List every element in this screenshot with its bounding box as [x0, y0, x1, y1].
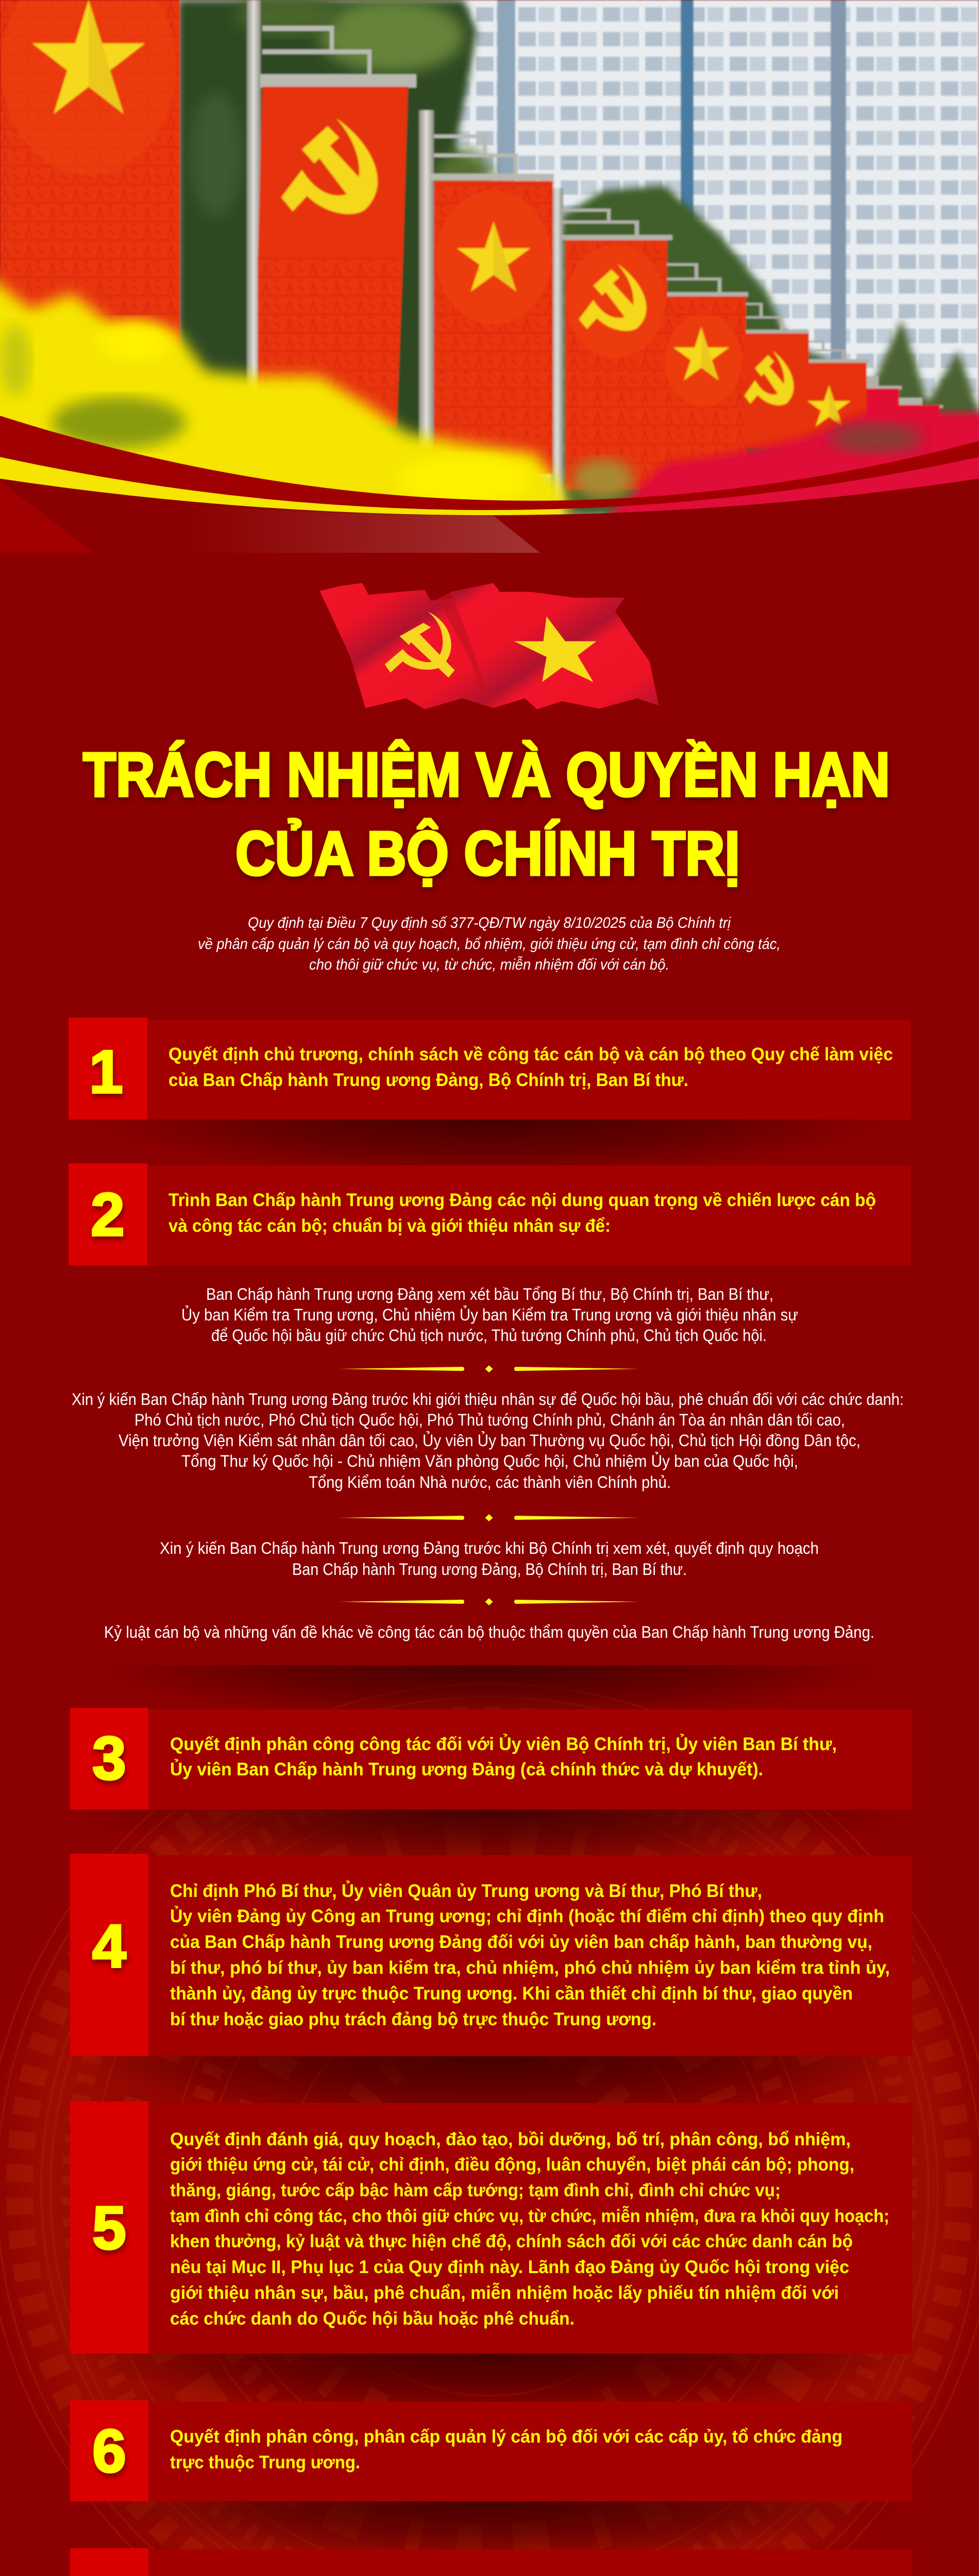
buildings: [178, 0, 979, 514]
panel text: bí thư hoặc giao phụ trách đảng bộ trực thuộc Trung ương.: [170, 2009, 656, 2029]
text block: consulting on positions: Tổng Kiểm toán Nhà nước, các thành viên Chính phủ.: [309, 1473, 671, 1492]
panel text: Chỉ định Phó Bí thư, Ủy viên Quân ủy Trung ương và Bí thư, Phó Bí thư,: [170, 1880, 762, 1901]
panel text: của Ban Chấp hành Trung ương Đảng, Bộ Chính trị, Ban Bí thư.: [168, 1070, 688, 1090]
subtitle: cho thôi giữ chức vụ, từ chức, miễn nhiệm đối với cán bộ.: [309, 956, 669, 973]
number: 3: [92, 1724, 126, 1792]
panel text: Ủy viên Đảng ủy Công an Trung ương; chỉ định (hoặc thí điểm chỉ định) theo quy định: [170, 1906, 884, 1926]
panel text: [170, 2129, 889, 2329]
panel body: [148, 1709, 912, 1809]
number badge: [70, 2102, 148, 2353]
divider: [339, 1514, 639, 1521]
number badge: [70, 1854, 148, 2056]
panel text: bí thư, phó bí thư, ủy ban kiểm tra, chủ nhiệm, phó chủ nhiệm ủy ban kiểm tra tỉnh ủy,: [170, 1958, 890, 1978]
number badge: [69, 1018, 147, 1120]
panel text: và công tác cán bộ; chuẩn bị và giới thiệu nhân sự để:: [168, 1216, 611, 1236]
panel text: Quyết định chủ trương, chính sách về công tác cán bộ và cán bộ theo Quy chế làm việc: [168, 1044, 893, 1064]
panel text: trực thuộc Trung ương.: [170, 2452, 360, 2472]
panel text: Ủy viên Ban Chấp hành Trung ương Đảng (cả chính thức và dự khuyết).: [170, 1759, 763, 1780]
panel 3: [70, 1708, 912, 1809]
title: [83, 739, 890, 888]
subtitle: [198, 914, 781, 973]
hammer and sickle: [385, 612, 454, 677]
number badge: [69, 1163, 147, 1265]
panel text: của Ban Chấp hành Trung ương Đảng đối với ủy viên ban chấp hành, ban thường vụ,: [170, 1932, 872, 1952]
panel body: [148, 2550, 912, 2576]
background drum pattern: [0, 1684, 979, 2576]
text block: consulting on positions: Viện trưởng Viện Kiểm sát nhân dân tối cao, Ủy viên Ủy ban Thường vụ Quốc hội, Chủ tịch Hội đồng Dân tộc,: [119, 1431, 860, 1450]
title: CỦA BỘ CHÍNH TRỊ: [235, 818, 740, 888]
panel 6: [70, 2400, 912, 2501]
panel 1: [69, 1018, 910, 1120]
shadow under panel 5: [70, 2353, 912, 2410]
panel 4: [70, 1854, 912, 2056]
shadow above panel 3: [93, 1665, 886, 1722]
poles and rails: [247, 0, 943, 507]
panel text: [170, 1880, 890, 2029]
panel text: [170, 1734, 837, 1780]
panel text: nêu tại Mục II, Phụ lục 1 của Quy định này. Lãnh đạo Đảng ủy Quốc hội trong việc: [170, 2257, 849, 2277]
star: [514, 616, 597, 682]
flags: [0, 0, 940, 489]
panel text: Quyết định phân công công tác đối với Ủy viên Bộ Chính trị, Ủy viên Ban Bí thư,: [170, 1734, 837, 1754]
panel body: [148, 1855, 912, 2056]
divider: [339, 1598, 639, 1605]
text block: elections: [181, 1285, 798, 1345]
subtitle: Quy định tại Điều 7 Quy định số 377-QĐ/TW ngày 8/10/2025 của Bộ Chính trị: [248, 914, 731, 931]
panel text: Quyết định đánh giá, quy hoạch, đào tạo, bồi dưỡng, bố trí, phân công, bổ nhiệm,: [170, 2129, 851, 2149]
text block: consulting on positions: [72, 1390, 904, 1492]
text block: planning: [160, 1539, 819, 1579]
panel text: Trình Ban Chấp hành Trung ương Đảng các nội dung quan trọng về chiến lược cán bộ: [168, 1190, 876, 1210]
panel text: Quyết định phân công, phân cấp quản lý cán bộ đối với các cấp ủy, tổ chức đảng: [170, 2427, 842, 2447]
text block: elections: Ban Chấp hành Trung ương Đảng xem xét bầu Tổng Bí thư, Bộ Chính trị, Ban Bí thư,: [206, 1285, 773, 1303]
number badge: [70, 1708, 148, 1809]
panel text: thăng, giáng, tước cấp bậc hàm cấp tướng; tạm đình chỉ, đình chỉ chức vụ;: [170, 2180, 781, 2200]
number badge: [70, 2548, 148, 2576]
panel text: [170, 2427, 842, 2472]
yellow flowers: [0, 273, 567, 531]
number: 2: [91, 1181, 125, 1249]
panel text: giới thiệu nhân sự, bầu, phê chuẩn, miễn nhiệm hoặc lấy phiếu tín nhiệm đối với: [170, 2282, 839, 2303]
panel 2: [69, 1163, 910, 1265]
text block: discipline: Kỷ luật cán bộ và những vấn đề khác về công tác cán bộ thuộc thẩm quyền của Ban Chấp hành Trung ương Đảng.: [104, 1623, 874, 1641]
number: 5: [92, 2194, 126, 2262]
shadow under panel 1: [93, 1120, 886, 1176]
shadow under panel 6: [70, 2501, 912, 2558]
number: 1: [89, 1038, 123, 1106]
text block: consulting on positions: Phó Chủ tịch nước, Phó Chủ tịch Quốc hội, Phó Thủ tướng Chính phủ, Chánh án Tòa án nhân dân tối cao,: [134, 1411, 845, 1429]
header flags emblem: [320, 583, 659, 709]
text block: planning: Ban Chấp hành Trung ương Đảng, Bộ Chính trị, Ban Bí thư.: [292, 1560, 687, 1579]
panel text: các chức danh do Quốc hội bầu hoặc phê chuẩn.: [170, 2309, 575, 2329]
panel body: [148, 2103, 912, 2353]
number: 4: [92, 1912, 126, 1980]
hero photo: party and national flags along a street: [0, 0, 979, 536]
text block: consulting on positions: Xin ý kiến Ban Chấp hành Trung ương Đảng trước khi giới thiệu nhân sự để Quốc hội bầu, phê chuẩn đối với các chức danh:: [72, 1390, 904, 1409]
panel text: tạm đình chỉ công tác, cho thôi giữ chức vụ, từ chức, miễn nhiệm, đưa ra khỏi quy hoạch;: [170, 2206, 889, 2226]
panel body: [147, 1165, 910, 1265]
panel text: thành ủy, đảng ủy trực thuộc Trung ương. Khi cần thiết chỉ định bí thư, giao quyền: [170, 1984, 853, 2004]
hero swoosh curve: [0, 416, 979, 510]
text block: consulting on positions: Tổng Thư ký Quốc hội - Chủ nhiệm Văn phòng Quốc hội, Chủ nhiệm Ủy ban của Quốc hội,: [181, 1452, 798, 1470]
panel body: [147, 1020, 910, 1120]
panel text: khen thưởng, kỷ luật và thực hiện chế độ, chính sách đối với các chức danh cán bộ: [170, 2231, 853, 2251]
panel 5: [70, 2102, 912, 2353]
shadow under panel 3: [70, 1809, 912, 1866]
text block: planning: Xin ý kiến Ban Chấp hành Trung ương Đảng trước khi Bộ Chính trị xem xét, quyết định quy hoạch: [160, 1539, 819, 1557]
text block: elections: để Quốc hội bầu giữ chức Chủ tịch nước, Thủ tướng Chính phủ, Chủ tịch Quốc hội.: [211, 1326, 767, 1345]
panel text: [168, 1044, 893, 1090]
hero lower gradient band: [175, 504, 540, 553]
text block: elections: Ủy ban Kiểm tra Trung ương, Chủ nhiệm Ủy ban Kiểm tra Trung ương và giới thiệu nhân sự: [181, 1306, 798, 1324]
subtitle: về phân cấp quản lý cán bộ và quy hoạch, bổ nhiệm, giới thiệu ứng cử, tạm đình chỉ công tác,: [198, 936, 781, 953]
pink flowers: [572, 412, 979, 531]
panel text: [168, 1190, 876, 1236]
number: 6: [92, 2417, 126, 2485]
divider: [339, 1365, 639, 1372]
shadow under panel 4: [70, 2056, 912, 2113]
panel 7: [70, 2548, 912, 2576]
panel text: giới thiệu ứng cử, tái cử, chỉ định, điều động, luân chuyển, biệt phái cán bộ; phong,: [170, 2155, 854, 2175]
hero lower left triangle: [0, 481, 94, 553]
number badge: [70, 2400, 148, 2501]
trees: [178, 0, 979, 515]
panel body: [148, 2402, 912, 2501]
